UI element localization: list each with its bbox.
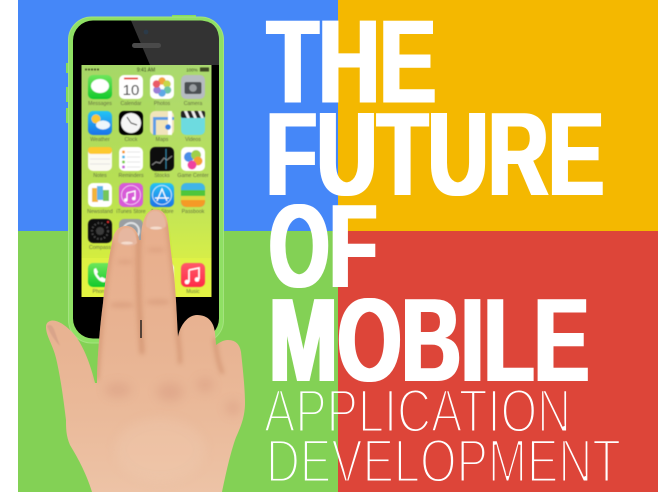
speaker (132, 43, 161, 48)
app icons (88, 75, 205, 287)
icon labels: Weather (90, 137, 110, 143)
icon: calendar (119, 75, 143, 99)
subtitle line: APPLICATION: APPLICATION (264, 377, 571, 445)
glass reflection (131, 20, 219, 65)
icon labels: Music (186, 289, 200, 295)
title (266, 0, 604, 407)
panel: green quadrant (18, 231, 338, 492)
icon: notes (88, 147, 112, 171)
finger joints (110, 248, 170, 308)
status bar (85, 68, 209, 74)
icon labels: Stocks (154, 173, 170, 179)
icon labels (87, 101, 209, 295)
icon: compass (88, 219, 112, 243)
camera dot (144, 30, 148, 34)
middle nail tip (150, 226, 162, 230)
skin shading (97, 224, 238, 414)
icon: game center (181, 147, 205, 171)
icon labels: Reminders (118, 173, 144, 179)
thumbnail (47, 325, 60, 346)
icon labels: Passbook (182, 209, 205, 215)
icon labels: App Store (150, 209, 174, 215)
icon: videos (181, 111, 205, 135)
icon: music (181, 263, 205, 287)
icon: calendar: 10 (123, 82, 139, 99)
icon labels: Messages (88, 101, 112, 107)
icon: phone (88, 263, 112, 287)
icon: safari (150, 263, 174, 287)
panel: red quadrant (338, 231, 658, 492)
icon labels: Calendar (120, 101, 142, 107)
panel: blue quadrant (18, 0, 338, 231)
icon: newsstand (88, 183, 112, 207)
icon labels: Compass (89, 245, 111, 251)
icon labels: Camera (184, 101, 202, 107)
icon labels: iTunes Store (116, 209, 146, 215)
screen reflection (150, 65, 212, 297)
title line: OF: OF (269, 180, 377, 313)
icon labels: Notes (93, 173, 107, 179)
screen (82, 65, 212, 297)
icon: app store (150, 183, 174, 207)
icon: passbook (181, 183, 205, 207)
icon: stocks (150, 147, 174, 171)
icon: reminders (119, 147, 143, 171)
finger side shadows (97, 225, 222, 378)
hand (46, 210, 245, 492)
icon: settings (119, 219, 143, 243)
icon: itunes store (119, 183, 143, 207)
index nail tip (121, 242, 133, 244)
icon labels: Phone (92, 289, 108, 295)
subtitle (264, 377, 621, 492)
status bar: 9:41 AM (137, 68, 155, 74)
hand silhouette (46, 210, 245, 492)
icon: photos (150, 75, 174, 99)
icon: maps (150, 111, 174, 135)
phone side buttons (66, 15, 196, 123)
palm highlight (115, 418, 205, 482)
icon labels: Clock (125, 137, 138, 143)
icon: clock (119, 111, 143, 135)
icon: messages (88, 75, 112, 99)
icon labels: Maps (156, 137, 169, 143)
phone (66, 15, 224, 343)
phone body (68, 17, 224, 343)
knuckles (108, 380, 238, 414)
gap between fingers (140, 320, 142, 338)
icon labels: Newsstand (87, 209, 113, 215)
index fingernail (118, 228, 137, 246)
icon: camera (181, 75, 205, 99)
icon labels: Videos (185, 137, 201, 143)
dock (82, 258, 212, 297)
icon labels: Game Center (177, 173, 209, 179)
status bar: 100% (186, 68, 198, 72)
panel: yellow quadrant (338, 0, 658, 231)
phone front glass (73, 20, 219, 338)
icon: weather (88, 111, 112, 135)
middle fingernail (146, 211, 166, 230)
icon labels: Photos (154, 101, 170, 107)
